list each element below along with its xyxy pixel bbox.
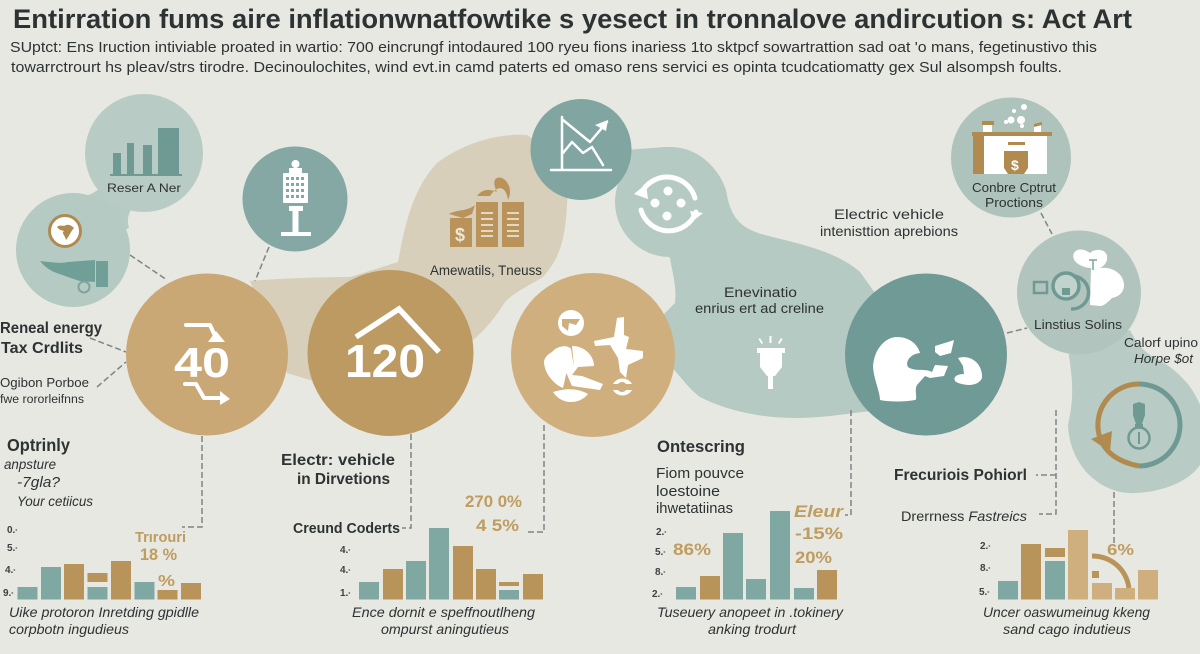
circle: 120 — [308, 270, 474, 436]
axis labels: 1.° — [340, 588, 350, 599]
axis labels: 4.° — [340, 545, 350, 556]
caption: Tuseuery anopeet in .tokinery — [657, 604, 844, 620]
caption — [657, 604, 844, 637]
bars — [18, 561, 201, 600]
text block: Your cetiicus — [17, 493, 93, 509]
text block: calorf upino: Horpe $ot — [1134, 351, 1194, 366]
axis labels: 2.° — [652, 589, 662, 600]
caption: ompurst aningutieus — [381, 621, 509, 637]
icon: bars — [110, 128, 182, 176]
axis labels — [652, 527, 666, 600]
caption — [983, 604, 1150, 637]
text block: electric vehicle: Electric vehicle — [834, 206, 944, 222]
text block: electric vehicle — [820, 206, 958, 239]
icon: arrows — [185, 325, 230, 405]
icon: people and tools — [544, 310, 643, 402]
callouts — [673, 502, 845, 567]
callout: 6% — [1107, 542, 1134, 559]
icon: building with dollar jar: $ — [1011, 157, 1019, 173]
heading: renewal energy tax credits: Reneal energy — [0, 320, 102, 337]
callouts: 18 % — [140, 545, 177, 564]
axis labels — [340, 545, 350, 599]
circle: bar chart icon — [85, 94, 203, 240]
axis labels: 9.° — [3, 588, 13, 599]
circle: tower icon — [242, 146, 348, 252]
axis labels: 0.° — [7, 525, 17, 536]
circle: people — [511, 273, 675, 437]
circle: linstius — [1017, 230, 1141, 354]
axis labels: 5.° — [979, 587, 989, 598]
text block: left note — [0, 376, 89, 406]
axis labels: 8.° — [980, 563, 990, 574]
caption: Uncer oaswumeinug kkeng — [983, 604, 1150, 620]
bars — [676, 511, 837, 600]
circle: hand icon — [16, 193, 130, 307]
callouts — [465, 492, 522, 535]
icon: recycle ring — [634, 177, 703, 231]
caption — [9, 604, 199, 637]
text block: anpsture — [4, 456, 56, 472]
icon: hand — [40, 260, 108, 292]
callouts: Eleur — [794, 502, 845, 521]
sub label: Creund Coderts — [293, 521, 400, 537]
axis labels: 2.° — [656, 527, 666, 538]
axis labels — [979, 541, 990, 598]
label: Reser A Ner — [107, 183, 181, 195]
heading: Electr: vehicle — [281, 452, 395, 469]
caption: corpbotn ingudieus — [9, 621, 129, 637]
subtitle text: towarrctrourt hs pleav/strs tirodre. Decinoulochites, wind evt.in camd paterts ed omaso rens servici es opinta tcudcatiomatty gex Sul alsompsh foults. — [11, 59, 1062, 76]
heading: Optrinly — [7, 435, 70, 455]
sage blob background — [615, 147, 880, 418]
axis labels: 5.° — [655, 547, 665, 558]
text block — [656, 466, 744, 517]
circle: line chart icon — [530, 99, 632, 200]
circle: 40: 40 — [174, 339, 230, 386]
panel: chart 4 — [894, 467, 1158, 637]
circle: 40 — [126, 274, 288, 436]
panel: chart 3 — [652, 437, 845, 637]
icon: abstract head — [873, 337, 982, 402]
callouts: -15% — [795, 524, 843, 543]
axis labels — [3, 525, 17, 599]
panel: chart 2 — [281, 452, 543, 637]
heading: in Dirvetions — [297, 471, 390, 488]
caption — [352, 604, 535, 637]
icon: circular arrow with figure — [1091, 384, 1180, 466]
callouts: 86% — [673, 540, 711, 559]
label — [972, 180, 1056, 210]
panel: chart 1 — [3, 435, 201, 637]
text block — [4, 456, 93, 509]
callouts: Trırouri — [135, 529, 186, 546]
caption: Ence dornit e speffnoutlheng — [352, 604, 535, 620]
text block: sage blob — [695, 285, 824, 316]
text block: electric vehicle: intenisttion aprebions — [820, 223, 958, 239]
caption: sand cago indutieus — [1003, 621, 1131, 637]
heading — [281, 452, 395, 488]
icon: solar tower — [281, 160, 311, 236]
callouts: 20% — [795, 548, 832, 567]
arc — [1092, 556, 1129, 588]
text block: calorf upino: Calorf upino — [1124, 335, 1198, 350]
connector lines — [90, 213, 1114, 545]
axis labels: 4.° — [340, 565, 350, 576]
heading: renewal energy tax credits: Tax Crdlits — [1, 340, 83, 357]
heading: Ontescring — [657, 437, 745, 456]
icon: roof — [356, 309, 439, 352]
bars — [359, 528, 543, 600]
axis labels: 8.° — [655, 567, 665, 578]
heading: renewal energy tax credits — [0, 320, 102, 357]
axis labels: 2.° — [980, 541, 990, 552]
heading: Frecuriois Pohiorl — [894, 467, 1027, 484]
callouts: 4 5% — [476, 516, 519, 535]
callouts: 270 0% — [465, 492, 522, 511]
caption: anking trodurt — [708, 621, 797, 637]
icon: dollar buildings — [449, 178, 524, 247]
icon: plug — [757, 336, 785, 389]
text block: sage blob: enrius ert ad creline — [695, 301, 824, 316]
callouts: % — [158, 573, 175, 590]
icon: coin — [50, 216, 80, 246]
caption: Uike protoron Inretding gpidlle — [9, 604, 199, 620]
beige blob background — [250, 135, 567, 420]
text block: -7gla? — [17, 474, 61, 491]
icon: dollar buildings: $ — [455, 225, 465, 245]
axis labels: 5.° — [7, 543, 17, 554]
axis labels: 4.° — [5, 565, 15, 576]
text block: Fiom pouvce — [656, 466, 744, 482]
label: Conbre Cptrut — [972, 180, 1056, 195]
bars — [998, 530, 1158, 600]
text block: loestoine — [656, 484, 720, 500]
subtitle text: SUptct: Ens Iruction intiviable proated in wartio: 700 eincrungf intodaured 100 ryeu fions inariess 1to sktpcf sowartrattion sad oat 'o mans, fegetinustivo this — [10, 39, 1097, 56]
sub label: Drerrness Fastreics — [901, 508, 1027, 524]
text block: ihwetatiinas — [656, 501, 733, 517]
bottom right blob background — [1068, 330, 1200, 493]
callouts — [135, 529, 186, 590]
circle: top right — [951, 98, 1071, 218]
label: beige blob: Amewatils, Tneuss — [430, 263, 542, 278]
text block: left note: fwe rororleifnns — [0, 394, 84, 406]
icon: cloud and rings — [1034, 250, 1124, 309]
label: Proctions — [985, 195, 1044, 210]
text block: sage blob: Enevinatio — [724, 285, 797, 300]
circle: 120: 120 — [345, 335, 425, 387]
text block: calorf upino — [1124, 335, 1198, 366]
circle: big teal — [845, 274, 1007, 436]
label: Linstius Solins — [1034, 317, 1123, 332]
title: Entirration fums aire inflationwnatfowtike s yesect in tronnalove andircution s: Act Art — [13, 4, 1132, 34]
text block: left note: Ogibon Porboe — [0, 376, 89, 390]
subtitle text — [10, 39, 1097, 76]
